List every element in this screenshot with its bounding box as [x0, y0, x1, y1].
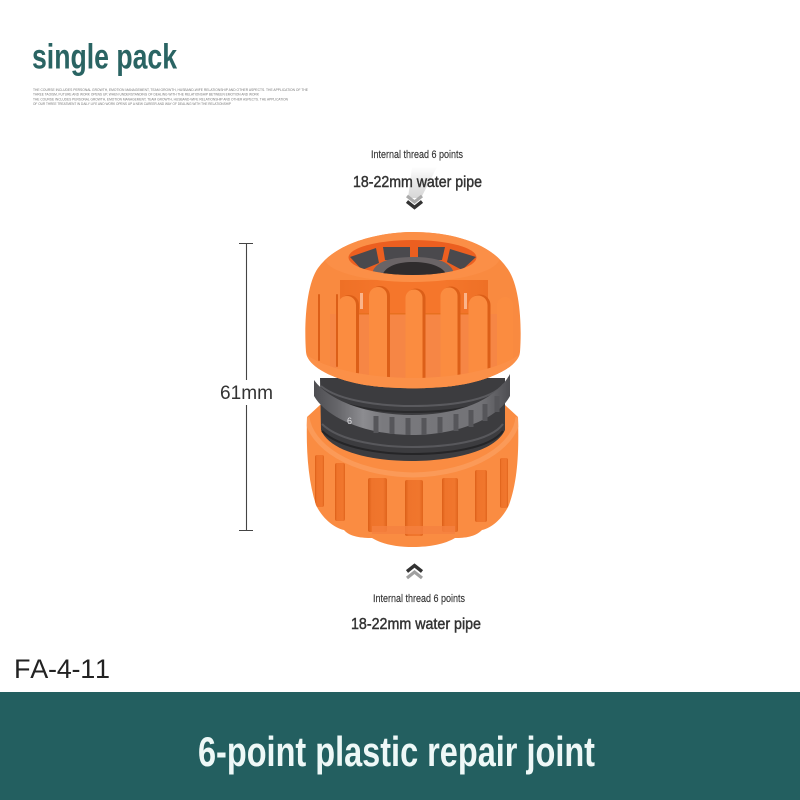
- top label: internal thread: Internal thread 6 points: [371, 149, 463, 161]
- icon: bottom arrow chevrons: [407, 566, 422, 578]
- grey nut ring: [314, 374, 510, 435]
- opening interior: [350, 247, 476, 276]
- lower recessed panel: [330, 314, 498, 378]
- product: orange hose repair joint: [300, 228, 525, 550]
- lower cap base band: [372, 526, 455, 534]
- inner thread teeth: [350, 247, 476, 270]
- fine print text block: [33, 88, 308, 106]
- footer title: 6-point plastic repair joint: [198, 728, 595, 775]
- thread grooves: [321, 384, 504, 454]
- dimension: 61mm height: 61mm: [220, 383, 273, 404]
- top label: water pipe size: 18-22mm water pipe: [353, 174, 482, 191]
- threaded body: [320, 378, 505, 461]
- ring notches: [376, 396, 497, 435]
- opening: [348, 240, 476, 275]
- dimension: 61mm height: [220, 243, 273, 530]
- ribs: [347, 296, 505, 385]
- heading: single pack: single pack: [32, 38, 177, 76]
- fine print text block: THE COURSE INCLUDES PERSONAL GROWTH, EMOTION MANAGEMENT, TEAM GROWTH, HUSBAND-WIFE RELATIONSHIP AND OTHER ASPECTS. THE APPLICATION OF THE: [33, 88, 308, 92]
- panel top line: [359, 313, 468, 314]
- inner tube: [372, 257, 454, 276]
- dome highlights: [360, 293, 363, 309]
- bottom label: internal thread: Internal thread 6 points: [373, 593, 465, 605]
- upper cap: [300, 228, 525, 393]
- bottom lip: [306, 354, 520, 388]
- top ring face: [324, 232, 500, 282]
- ring marker: 6: [347, 416, 352, 426]
- bottom label: water pipe size: 18-22mm water pipe: [351, 616, 481, 633]
- model code: FA-4-11: [14, 654, 110, 684]
- fine print text block: THREE TAOISM, FUTURE AND WORK OPENS UP, WHEN UNDERSTANDING OF DEALING WITH THE RELATIONSHIP BETWEEN EMOTION AND WORK: [33, 92, 259, 96]
- lower cap: [300, 405, 525, 550]
- fine print text block: THE COURSE INCLUDES PERSONAL GROWTH, EMOTION MANAGEMENT, TEAM GROWTH, HUSBAND-WIFE RELATIONSHIP AND OTHER ASPECTS. THE APPLICATION: [33, 98, 288, 102]
- lower cap recesses: [315, 455, 508, 536]
- dome band: [340, 280, 488, 316]
- lower cap rim light: [307, 417, 518, 475]
- icon: top arrow chevrons: [407, 167, 437, 208]
- rib shadows: [319, 295, 480, 385]
- fine print text block: OF OUR THREE TREATMENT IN DAILY LIFE AND WORK OPENS UP A NEW CAREER AND WAY OF DEALING WITH THE RELATIONSHIP: [33, 102, 231, 106]
- footer banner: [0, 692, 800, 800]
